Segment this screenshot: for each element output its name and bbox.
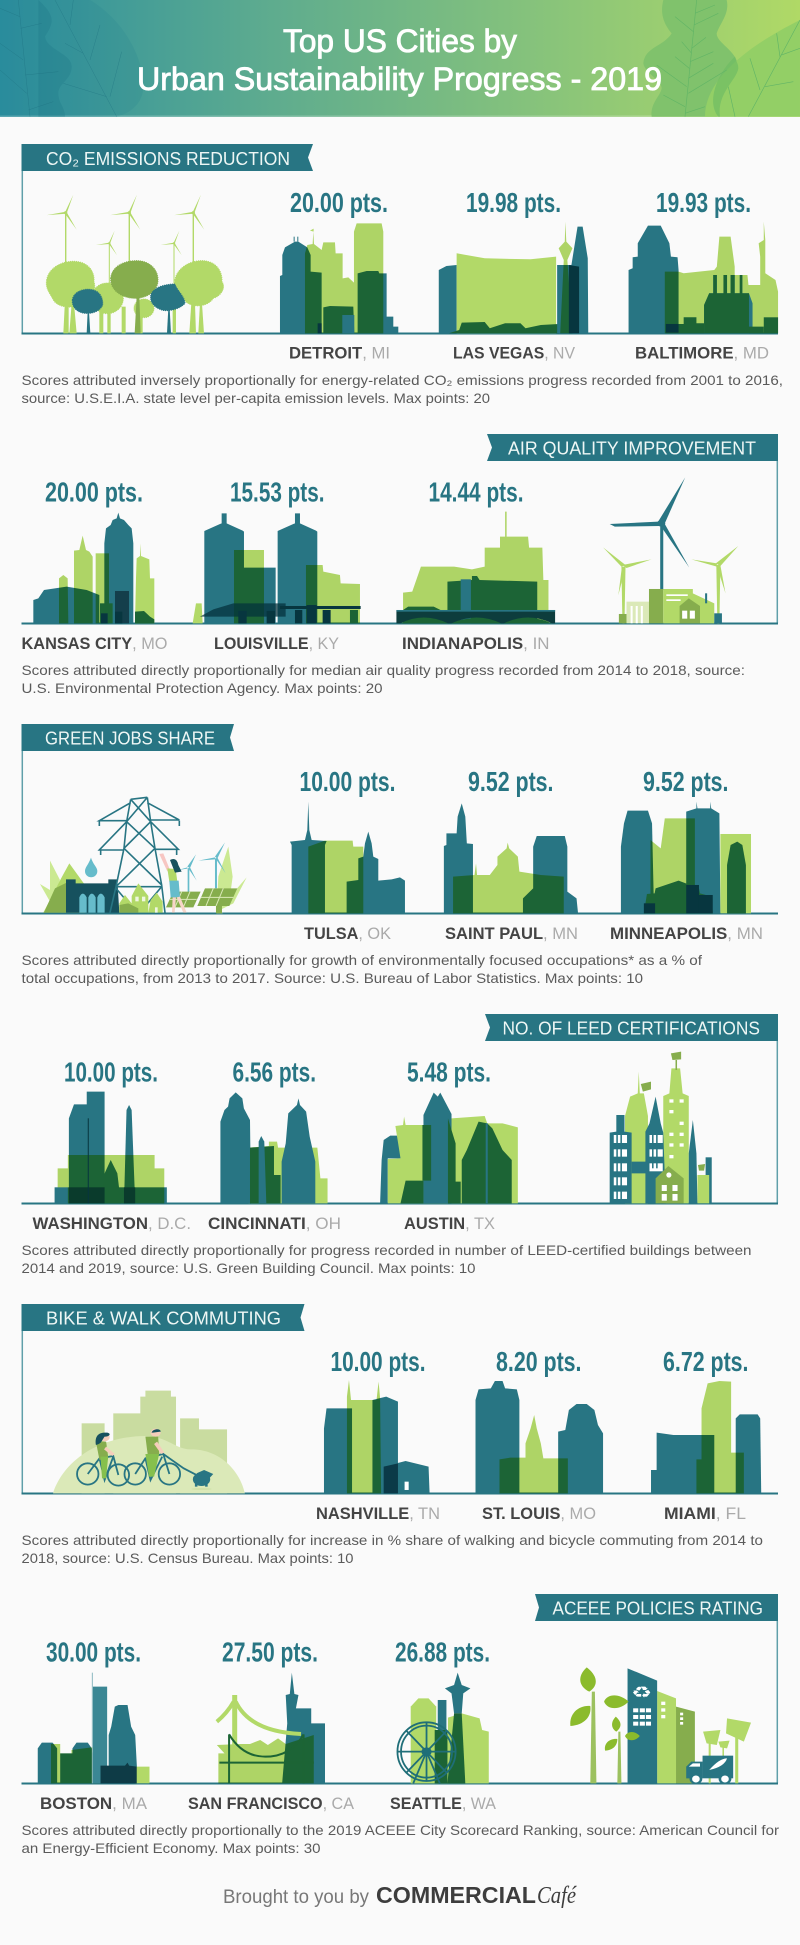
score: Indianapolis: 14.44 pts. xyxy=(428,476,524,508)
heading ribbon xyxy=(535,1594,778,1621)
heading ribbon: ACEEE POLICIES RATING xyxy=(552,1598,763,1618)
caption xyxy=(22,1532,763,1566)
icon: green building, leaf turbines, electric truck xyxy=(570,1667,751,1783)
score: Washington D.C.: 10.00 pts. xyxy=(64,1056,158,1088)
score: Tulsa: 10.00 pts. xyxy=(300,766,396,797)
skyline: Austin xyxy=(380,1093,518,1203)
label: Nashville: NASHVILLE, TN xyxy=(316,1505,440,1523)
footer: brought to you by CommercialCafe xyxy=(223,1882,577,1909)
label: Detroit: DETROIT, MI xyxy=(289,344,390,362)
score: Kansas City: 20.00 pts. xyxy=(45,476,143,508)
score: Louisville: 15.53 pts. xyxy=(230,476,324,508)
caption: an Energy-Efficient Economy. Max points: 30 xyxy=(22,1840,321,1856)
label: Kansas City: KANSAS CITY, MO xyxy=(22,635,168,653)
label: Boston: BOSTON, MA xyxy=(40,1795,147,1813)
caption xyxy=(22,1242,752,1276)
skyline: Tulsa xyxy=(290,802,405,913)
icon: LEED green buildings xyxy=(610,1052,712,1203)
caption: total occupations, from 2013 to 2017. Source: U.S. Bureau of Labor Statistics. Max points: 10 xyxy=(22,970,643,986)
skyline: Miami xyxy=(651,1381,761,1493)
skyline: Minneapolis xyxy=(621,802,751,913)
skyline: Nashville xyxy=(324,1380,430,1493)
skyline: Washington D.C. xyxy=(55,1092,167,1203)
label: San Francisco: SAN FRANCISCO, CA xyxy=(188,1795,354,1813)
header banner xyxy=(0,0,800,117)
heading ribbon: NO. OF LEED CERTIFICATIONS xyxy=(502,1018,760,1038)
score: Nashville: 10.00 pts. xyxy=(330,1346,426,1377)
label: Tulsa: TULSA, OK xyxy=(304,925,391,943)
skyline: Saint Paul xyxy=(444,803,578,913)
label: Washington D.C.: WASHINGTON, D.C. xyxy=(32,1215,191,1233)
heading ribbon xyxy=(22,724,234,751)
panel: green jobs share xyxy=(22,724,778,986)
skyline: San Francisco xyxy=(217,1673,325,1783)
footer: brought to you by CommercialCafe: COMMERCIAL xyxy=(376,1882,536,1908)
score: Las Vegas: 19.98 pts. xyxy=(466,187,561,218)
caption: 2018, source: U.S. Census Bureau. Max points: 10 xyxy=(22,1550,354,1566)
heading ribbon xyxy=(487,434,778,461)
score: Seattle: 26.88 pts. xyxy=(395,1636,490,1668)
score: Minneapolis: 9.52 pts. xyxy=(643,766,728,797)
skyline: Kansas City xyxy=(33,513,154,623)
score: Austin: 5.48 pts. xyxy=(407,1056,491,1088)
score: San Francisco: 27.50 pts. xyxy=(222,1636,318,1668)
label: Baltimore: BALTIMORE, MD xyxy=(635,344,769,362)
score: Boston: 30.00 pts. xyxy=(46,1636,141,1668)
label: St. Louis: ST. LOUIS, MO xyxy=(482,1505,596,1523)
icon: pylon, dam, woman, solar panels xyxy=(40,797,247,913)
caption: Scores attributed directly proportionally for growth of environmentally focused occupations* as a % of xyxy=(22,952,702,968)
score: Saint Paul: 9.52 pts. xyxy=(468,766,554,797)
label: Indianapolis: INDIANAPOLIS, IN xyxy=(402,635,550,653)
label: Minneapolis: MINNEAPOLIS, MN xyxy=(610,925,763,943)
icon: wind turbines and trees xyxy=(46,195,224,333)
heading ribbon: BIKE & WALK COMMUTING xyxy=(46,1308,281,1328)
score: St. Louis: 8.20 pts. xyxy=(496,1346,582,1377)
heading ribbon: CO₂ EMISSIONS REDUCTION xyxy=(46,149,290,169)
caption xyxy=(22,662,745,696)
decorative leaves: left xyxy=(0,0,143,117)
icon: cyclists and dog walker xyxy=(53,1391,245,1493)
score: Detroit: 20.00 pts. xyxy=(290,187,388,218)
footer: brought to you by CommercialCafe: Brought to you by xyxy=(223,1887,369,1908)
label: Miami: MIAMI, FL xyxy=(664,1505,746,1523)
icon: green building, leaf turbines, electric truck: ♻ xyxy=(631,1683,652,1701)
panel: number of LEED certifications xyxy=(22,1014,778,1276)
skyline: Las Vegas xyxy=(439,222,588,333)
caption: Scores attributed directly proportionally for progress recorded in number of LEED-certified buildings between xyxy=(22,1242,752,1258)
skyline: Seattle xyxy=(397,1673,489,1783)
caption xyxy=(22,952,702,986)
score: Miami: 6.72 pts. xyxy=(663,1346,748,1377)
caption: U.S. Environmental Protection Agency. Max points: 20 xyxy=(22,680,383,696)
score: Baltimore: 19.93 pts. xyxy=(656,187,751,218)
heading ribbon xyxy=(22,144,313,171)
heading ribbon xyxy=(22,1304,304,1331)
skyline: Baltimore xyxy=(629,222,778,333)
decorative leaves: right xyxy=(643,0,800,117)
skyline: Indianapolis xyxy=(396,512,555,623)
title: Urban Sustainability Progress - 2019 xyxy=(137,61,662,97)
caption: Scores attributed inversely proportionally for energy-related CO₂ emissions progress recorded from 2001 to 2016, xyxy=(22,372,783,388)
caption: 2014 and 2019, source: U.S. Green Building Council. Max points: 10 xyxy=(22,1260,476,1276)
score: Cincinnati: 6.56 pts. xyxy=(232,1056,316,1088)
label: Saint Paul: SAINT PAUL, MN xyxy=(445,925,578,943)
caption xyxy=(22,372,783,406)
panel: bike and walk commuting xyxy=(22,1304,778,1566)
caption: source: U.S.E.I.A. state level per-capita emission levels. Max points: 20 xyxy=(22,390,490,406)
label: Austin: AUSTIN, TX xyxy=(404,1215,495,1233)
skyline: St. Louis xyxy=(476,1381,603,1493)
title: Top US Cities by xyxy=(283,23,517,59)
label: Cincinnati: CINCINNATI, OH xyxy=(208,1215,341,1233)
label: Seattle: SEATTLE, WA xyxy=(390,1795,496,1813)
label: Las Vegas: LAS VEGAS, NV xyxy=(453,344,575,362)
heading ribbon xyxy=(485,1014,778,1041)
caption: Scores attributed directly proportionally for increase in % share of walking and bicycle commuting from 2014 to xyxy=(22,1532,763,1548)
panel: ACEEE policies rating xyxy=(22,1594,779,1856)
skyline: Louisville xyxy=(193,513,361,623)
icon: wind turbines and buildings xyxy=(603,477,738,623)
caption: Scores attributed directly proportionally for median air quality progress recorded from 2014 to 2018, source: xyxy=(22,662,745,678)
footer: brought to you by CommercialCafe: Café xyxy=(537,1883,577,1909)
heading ribbon: AIR QUALITY IMPROVEMENT xyxy=(508,438,756,458)
title xyxy=(137,23,662,97)
panel: air quality improvement xyxy=(22,434,778,696)
label: Louisville: LOUISVILLE, KY xyxy=(214,635,339,653)
panel: CO2 emissions reduction xyxy=(22,144,783,406)
skyline: Boston xyxy=(38,1673,149,1783)
caption: Scores attributed directly proportionally to the 2019 ACEEE City Scorecard Ranking, source: American Council for xyxy=(22,1822,779,1838)
caption xyxy=(22,1822,779,1856)
heading ribbon: GREEN JOBS SHARE xyxy=(45,728,215,748)
skyline: Cincinnati xyxy=(220,1092,328,1203)
skyline: Detroit xyxy=(280,223,398,333)
